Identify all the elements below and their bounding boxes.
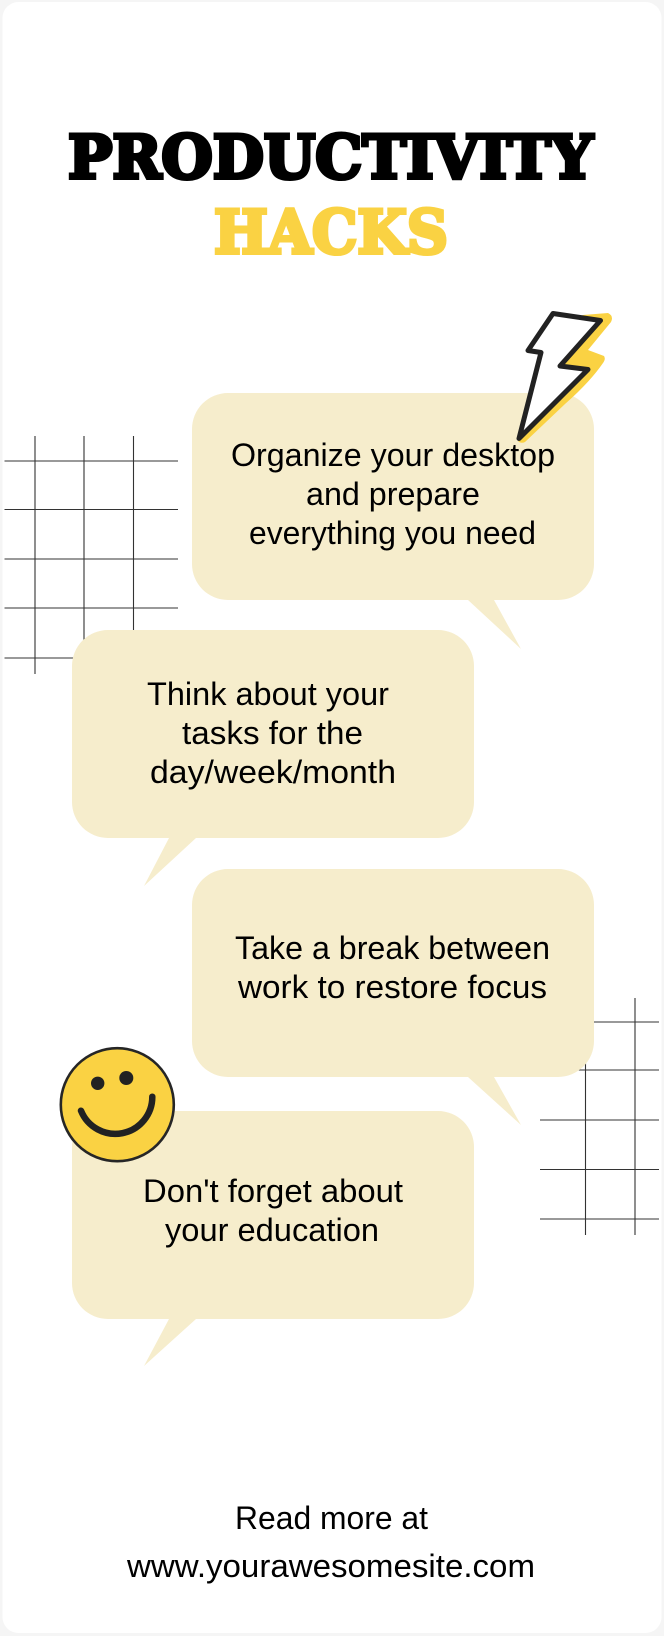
footer text: Read more at xyxy=(235,1500,428,1536)
right eye xyxy=(119,1071,133,1085)
bolt shadow xyxy=(518,313,612,443)
smile xyxy=(81,1097,152,1134)
icon: smiley face xyxy=(61,1048,174,1161)
bubble text: Think about your xyxy=(147,676,389,712)
bubble text: work to restore focus xyxy=(237,969,547,1005)
speech bubble 2 xyxy=(72,630,474,886)
heading: hacks: HACKS xyxy=(214,198,448,268)
left eye xyxy=(91,1077,104,1090)
heading: productivity: PRODUCTIVITY xyxy=(68,123,594,193)
grid decoration: left xyxy=(4,436,178,674)
bolt outline xyxy=(519,314,600,438)
bubble shape xyxy=(72,1111,474,1366)
bubble text: Don't forget about xyxy=(143,1173,403,1209)
bubble text: your education xyxy=(165,1212,379,1248)
speech bubble 1 xyxy=(192,393,594,649)
bubble shape xyxy=(192,869,594,1125)
bubble text: Take a break between xyxy=(235,930,550,966)
title xyxy=(68,123,594,268)
face xyxy=(61,1048,174,1161)
speech bubble 4 xyxy=(72,1111,474,1366)
bubble text: day/week/month xyxy=(150,754,396,790)
speech bubble 3 xyxy=(192,869,594,1125)
grid decoration: right xyxy=(540,998,659,1235)
footer text: www.yourawesomesite.com xyxy=(126,1548,535,1584)
bubble shape xyxy=(192,393,594,649)
bubble text: and prepare xyxy=(306,476,480,512)
bubble shape xyxy=(72,630,474,886)
icon: lightning bolt xyxy=(518,313,612,443)
bubble text: tasks for the xyxy=(182,715,363,751)
bubble text: everything you need xyxy=(249,515,536,551)
bubble text: Organize your desktop xyxy=(231,437,555,473)
